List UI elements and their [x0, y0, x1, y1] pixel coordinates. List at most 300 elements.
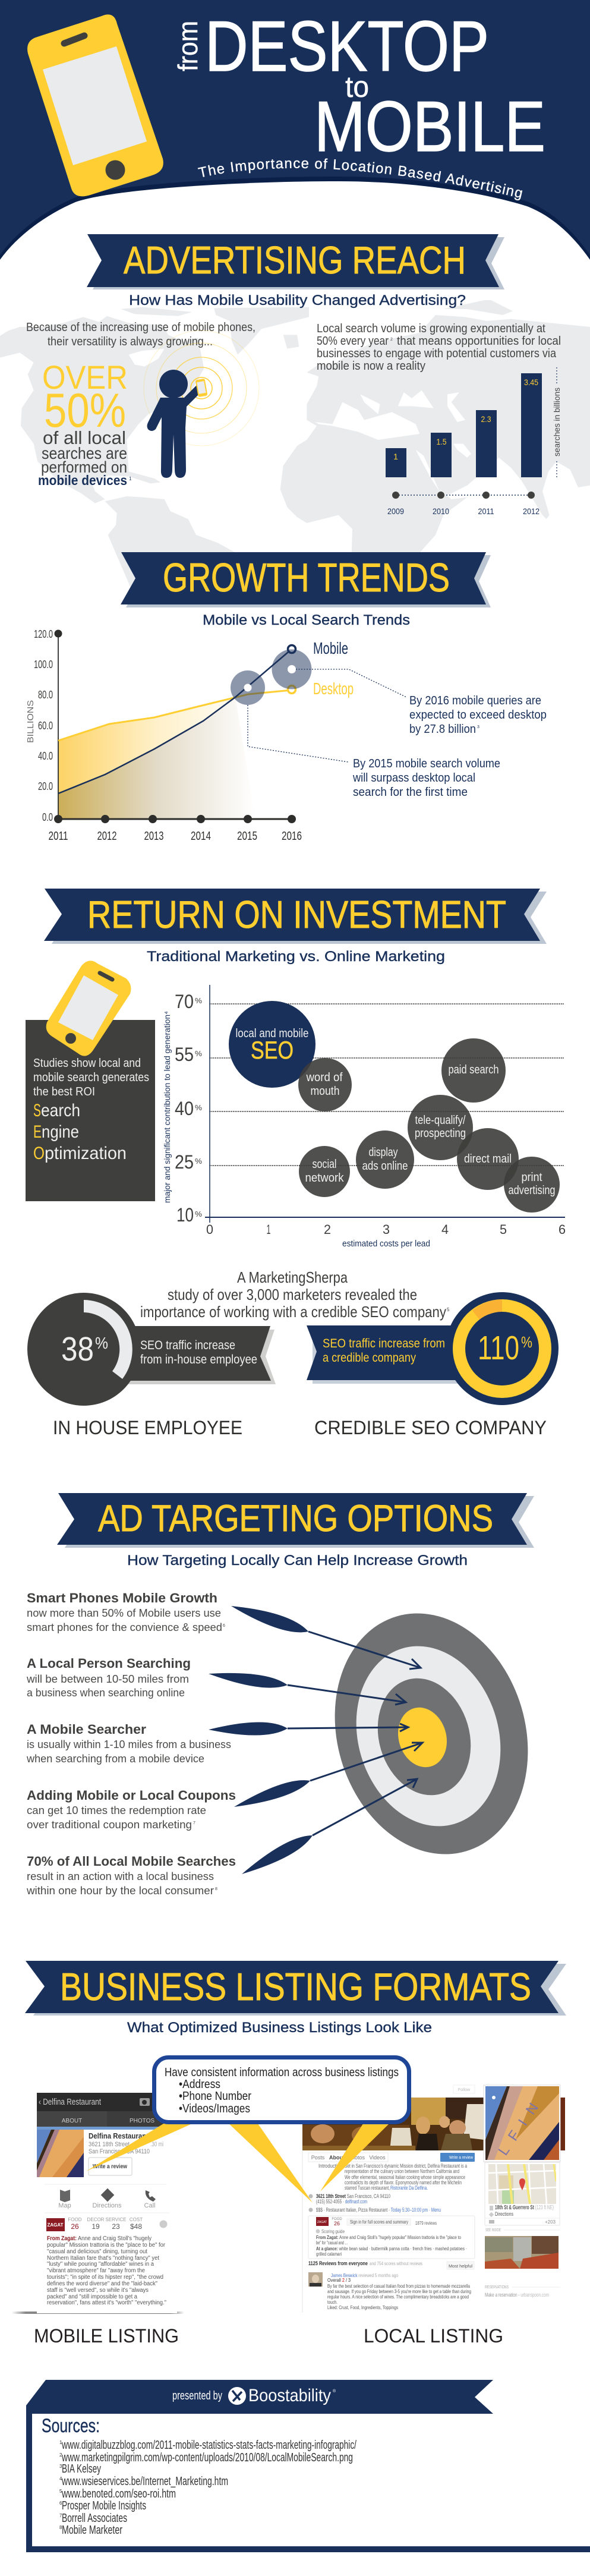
- callout: 2015 mobile search: will surpass desktop local: [352, 771, 475, 785]
- text: local search growth: Local search volume is growing exponentially at: [317, 322, 545, 335]
- icon: tilted yellow phone: [46, 961, 131, 1056]
- timeline axis: 2012: [523, 506, 539, 516]
- zagat description: packed" and "still impossible to get a: [47, 2294, 137, 2300]
- reviews: 1125 Reviews from everyone: [308, 2260, 368, 2266]
- introduction text: Introduction: [318, 2163, 342, 2169]
- end markers: [288, 645, 296, 693]
- bubble: print advertising: [504, 1157, 560, 1213]
- business details: 3621 18th Street: [89, 2141, 130, 2148]
- zagat scores: ZAGAT: [48, 2222, 64, 2228]
- x axis labels: [49, 830, 302, 843]
- banner: growth trends: GROWTH TRENDS: [163, 555, 450, 600]
- app tabs: [37, 2111, 177, 2130]
- label: local listing: LOCAL LISTING: [364, 2325, 503, 2347]
- title: DESKTOP: [205, 7, 489, 86]
- statistic: over 50 percent of local searches: 50%: [44, 384, 126, 437]
- subtitle on curved path: The Importance of Location Based Advertising: [197, 158, 523, 201]
- text: MarketingSherpa study: study of over 3,000 marketers revealed the: [168, 1286, 417, 1303]
- panel: credible SEO company: a credible company: [323, 1351, 416, 1365]
- y axis labels: 40.0: [38, 750, 53, 762]
- statistic: over 50 percent of local searches: mobile devices: [38, 473, 127, 488]
- y axis values: 55: [175, 1044, 194, 1065]
- bubble: tele-qualify prospecting: prospecting: [415, 1127, 466, 1140]
- text: mobile or local coupons: Adding Mobile or Local Coupons: [27, 1788, 236, 1803]
- zagat description: "vibrant atmosphere" far "away from the: [47, 2268, 145, 2274]
- callout box: [154, 2058, 409, 2122]
- callout box: •Phone Number: [179, 2090, 251, 2103]
- zagat panel: [308, 2216, 475, 2259]
- map card: [485, 2162, 560, 2225]
- y axis labels: 120.0: [34, 628, 53, 640]
- business details: [89, 2131, 163, 2175]
- reviews: [308, 2260, 474, 2310]
- text: MarketingSherpa study: 5: [447, 1307, 450, 1312]
- text: smart phones mobile growth: Smart Phones Mobile Growth: [27, 1591, 217, 1605]
- bubble: paid search: paid search: [448, 1063, 499, 1076]
- list: sources: 7: [59, 2513, 62, 2518]
- list: sources: 2: [59, 2452, 62, 2458]
- bubble: direct mail: direct mail: [464, 1152, 512, 1166]
- reservations: RESERVATIONS: [485, 2285, 509, 2290]
- zagat description: [47, 2235, 166, 2306]
- bubble: print advertising: print: [522, 1171, 542, 1184]
- desktop line: [58, 690, 292, 741]
- zagat description: Northern Italian fare that's "nothing fancy" yet: [47, 2255, 159, 2262]
- text: mobile searcher: is usually within 1-10 miles from a business: [27, 1739, 231, 1750]
- text: mobile or local coupons: 7: [193, 1821, 195, 1825]
- address and contact: 3621 18th Street San Francisco, CA 94110: [316, 2193, 390, 2199]
- zagat description: reservation", fans attest it's "worth" "everything.": [47, 2300, 166, 2306]
- icon: target: [307, 1590, 556, 1878]
- panel: credible SEO company: %: [521, 1333, 532, 1351]
- text: 70 percent of local mobile searches: result in an action with a local business: [27, 1870, 214, 1882]
- text: search engine optimization: [33, 1101, 127, 1163]
- callout: 2016 mobile queries: [409, 694, 547, 736]
- chart axes and grid: [205, 985, 565, 1223]
- arrow: local mobile searches: [242, 1779, 417, 1874]
- introduction text: representation of the culinary union between Northern California and: [345, 2168, 459, 2174]
- bar chart: searches in billions: [386, 367, 561, 516]
- highlight 2016: [272, 649, 311, 689]
- action icons: Map: [58, 2202, 71, 2209]
- bar 2009: [386, 448, 406, 477]
- map details: Directions: [495, 2211, 513, 2217]
- text: search engine optimization: O: [33, 1144, 45, 1163]
- title: [172, 7, 545, 166]
- statistic: over 50 percent of local searches: 1: [129, 476, 132, 481]
- list: sources: www.digitalbuzzblog.com/2011-mobile-statistics-stats-facts-marketing-infographic/: [61, 2439, 356, 2452]
- address and contact: $$$ · Restaurant Italian, Pizza Restaurant · Today 5:30–10:00 pm · Menu: [316, 2207, 441, 2213]
- text: local person searching: will be between 10-50 miles from: [26, 1673, 189, 1685]
- x axis values: 4: [441, 1222, 449, 1237]
- bubble: display ads online: display: [368, 1146, 398, 1159]
- x axis values: 6: [559, 1222, 566, 1237]
- banner: advertising reach: [87, 234, 504, 289]
- timeline axis: 2011: [478, 506, 494, 516]
- banner: ad targeting options: AD TARGETING OPTIONS: [98, 1498, 493, 1539]
- list: sources: 1: [59, 2440, 62, 2445]
- see inside photo: SEE INSIDE: [485, 2228, 501, 2232]
- zagat scores: DECOR: [87, 2217, 105, 2222]
- introduction text: [318, 2163, 467, 2191]
- bubble: display ads online: [356, 1130, 414, 1189]
- text: search engine optimization: ptimization: [45, 1144, 127, 1163]
- arrow: local person: [209, 1673, 406, 1705]
- text: local search growth: [317, 322, 561, 373]
- bar 2012: [521, 373, 542, 477]
- text: mobile searcher: when searching from a mobile device: [26, 1753, 204, 1765]
- tabs and review button: [308, 2153, 475, 2162]
- bubble: local and mobile SEO: local and mobile: [235, 1027, 309, 1040]
- series label desktop: Desktop: [313, 679, 354, 698]
- heading: targeting locally: How Targeting Locally Can Help Increase Growth: [127, 1552, 468, 1569]
- bubble: local and mobile SEO: SEO: [251, 1036, 294, 1064]
- callout: 2016 mobile queries: expected to exceed desktop: [409, 708, 547, 722]
- text: MarketingSherpa study: A MarketingSherpa: [237, 1268, 348, 1286]
- list: sources: Mobile Marketer: [62, 2524, 122, 2537]
- icon: large yellow smartphone: [27, 14, 163, 196]
- logo: Boostability: ®: [333, 2389, 336, 2394]
- text: studies: mobile search generates: [33, 1071, 149, 1084]
- introduction text: starred Tuscan restaurant,: [345, 2185, 390, 2191]
- app header: ‹ Delfina Restaurant: [39, 2097, 102, 2107]
- statistic: over 50 percent of local searches: searches are: [42, 444, 127, 462]
- bubble: social network: [299, 1146, 350, 1197]
- y axis title: major and significant contribution to lead generation⁴: [162, 1011, 172, 1203]
- label: in house employee: IN HOUSE EMPLOYEE: [53, 1417, 242, 1438]
- arrow: smart phones: [231, 1606, 421, 1669]
- x axis values: [206, 1222, 566, 1237]
- y axis labels: 0.0: [42, 811, 53, 823]
- text: 70 percent of local mobile searches: 70% of All Local Mobile Searches: [27, 1854, 236, 1869]
- text: mobile phones intro: their versatility is always growing...: [48, 335, 213, 348]
- zagat description: popular" Mission trattoria is the "place to be" for: [47, 2242, 166, 2249]
- x axis values: 1: [266, 1222, 271, 1237]
- x axis labels: 2015: [237, 830, 257, 843]
- bubble: display ads online: ads online: [362, 1160, 408, 1173]
- zagat description: Anne and Craig Stoll's "hugely: [78, 2235, 152, 2242]
- x axis labels: 2013: [144, 830, 164, 843]
- label: mobile listing: MOBILE LISTING: [34, 2325, 179, 2347]
- action icons: Call: [144, 2202, 155, 2209]
- introduction text: Ristorante Da Delfina.: [390, 2185, 428, 2191]
- statistic: over 50 percent of local searches: OVER: [42, 358, 128, 396]
- text: mobile searcher: [26, 1722, 231, 1765]
- heading: traditional vs online: Traditional Marketing vs. Online Marketing: [147, 949, 445, 965]
- bar 2012: 3.45: [524, 377, 538, 387]
- axes: [54, 630, 296, 823]
- heading: advertising reach question: How Has Mobile Usability Changed Advertising?: [129, 292, 466, 308]
- zagat panel: 1879 reviews: [415, 2221, 437, 2226]
- text: studies: the best ROI: [33, 1085, 95, 1098]
- see inside photo: [485, 2228, 560, 2269]
- zagat scores: 19: [92, 2222, 100, 2231]
- zagat panel: 26: [334, 2221, 340, 2227]
- leader line 2016: [296, 669, 406, 697]
- x axis title: estimated costs per lead: [342, 1239, 430, 1249]
- zagat description: staff is "well versed", so while it's "always: [47, 2287, 149, 2294]
- text: local person searching: [26, 1656, 191, 1699]
- business details: San Francisco, CA 94110: [89, 2148, 150, 2155]
- y axis values: %: [195, 1103, 202, 1112]
- text: MarketingSherpa study: [140, 1268, 450, 1321]
- zagat scores: SERVICE: [106, 2217, 126, 2222]
- reviews: Most helpful: [449, 2265, 472, 2269]
- banner: return on investment: [44, 889, 547, 944]
- y axis values: 40: [175, 1098, 194, 1119]
- timeline axis: 2010: [433, 506, 449, 516]
- text: local person searching: A Local Person Searching: [27, 1656, 191, 1671]
- text: local person searching: a business when searching online: [27, 1687, 185, 1699]
- text: studies: [33, 1057, 149, 1098]
- restaurant sign photo card: LFIN: [496, 2100, 542, 2158]
- banner: advertising reach: ADVERTISING REACH: [124, 238, 466, 282]
- reviews: and sausage. If you go Friday between 3-5 you're more like to get a table than during: [327, 2288, 471, 2294]
- callout box: Have consistent information across business listings: [165, 2066, 399, 2079]
- text: smart phones mobile growth: 6: [223, 1624, 225, 1628]
- y axis values: %: [195, 1157, 202, 1166]
- callout box: •Videos/Images: [179, 2102, 250, 2115]
- panel: in house employee: SEO traffic increase: [140, 1339, 235, 1352]
- panel: credible SEO company: SEO traffic increase from: [323, 1337, 445, 1350]
- heading: mobile vs local search trends: Mobile vs Local Search Trends: [203, 612, 410, 628]
- list: sources: 3: [59, 2464, 62, 2469]
- y axis labels: 60.0: [38, 720, 53, 732]
- x axis values: 2: [324, 1222, 331, 1237]
- panel: in house employee: %: [95, 1334, 108, 1352]
- business details: .30 mi: [150, 2141, 163, 2148]
- callout: 2015 mobile search: search for the first time: [353, 786, 468, 799]
- title: from: [172, 21, 203, 71]
- text: 70 percent of local mobile searches: [26, 1854, 236, 1897]
- reviews: regular hours. A nice selection of wines. The complimentary breadsticks are a good: [327, 2294, 469, 2300]
- y axis values: %: [195, 1049, 202, 1058]
- zagat panel: ZAGAT: [317, 2221, 327, 2224]
- panel: in house employee: from in-house employee: [140, 1353, 257, 1366]
- tabs and review button: About: [329, 2155, 345, 2161]
- text: local search growth: 50% every year: [317, 335, 389, 348]
- text: mobile or local coupons: over traditional coupon marketing: [27, 1819, 192, 1831]
- zagat scores: COST: [130, 2217, 143, 2222]
- reviews: touch.: [327, 2299, 337, 2305]
- zagat description: defines the word diverse" and the "laid-back": [47, 2281, 157, 2287]
- panel: local listing screenshot: [302, 2085, 565, 2313]
- reviews: and 754 scores without reviews: [370, 2260, 422, 2266]
- text: local search growth: mobile is now a reality: [317, 360, 425, 373]
- text: mobile phones intro: [26, 321, 255, 348]
- list: sources: www.benoted.com/seo-roi.htm: [61, 2487, 176, 2501]
- statistic: over 50 percent of local searches: [38, 358, 132, 488]
- panel: SEO best ROI: [26, 961, 155, 1201]
- x axis values: 0: [206, 1222, 213, 1237]
- title: to: [345, 70, 369, 103]
- y axis values: %: [195, 1210, 202, 1218]
- list: sources: [59, 2439, 356, 2537]
- panel: in house employee: [27, 1293, 276, 1406]
- bubble: local and mobile SEO: [229, 1001, 315, 1088]
- banner: ad targeting options: [57, 1493, 534, 1548]
- x axis labels: 2014: [191, 830, 211, 843]
- panel: mobile listing screenshot: [12, 2093, 184, 2314]
- zagat scores: 26: [71, 2222, 79, 2231]
- bubble: social network: social: [313, 1158, 336, 1171]
- text: mobile phones intro: Because of the increasing use of mobile phones,: [26, 321, 255, 334]
- zagat description: "casual and delicious" dining, turning out: [47, 2249, 147, 2255]
- tabs and review button: Photos: [348, 2155, 365, 2161]
- x axis values: 3: [383, 1222, 390, 1237]
- reservations: Make a reservation - urbanspoon.com: [485, 2292, 549, 2298]
- bubble: word of mouth: word of: [306, 1071, 343, 1084]
- reviews: James Beswick reviewed 5 months ago: [331, 2272, 398, 2278]
- icon: signal rings around phone: [144, 330, 259, 446]
- business details: Delfina Restaurant: [89, 2131, 149, 2140]
- callout: consistent business information: [86, 2058, 409, 2203]
- presented by: presented by: [172, 2389, 222, 2402]
- introduction text: We offer elemental, seasonal Italian cooking whose simple appearance: [345, 2174, 465, 2180]
- zagat scores: 23: [112, 2222, 120, 2231]
- zagat panel: be" for "casual and ...: [316, 2240, 348, 2246]
- bubble: print advertising: advertising: [509, 1184, 555, 1197]
- panel: credible SEO company: [307, 1292, 559, 1405]
- zagat panel: FOOD: [332, 2218, 342, 2221]
- text: smart phones mobile growth: [27, 1591, 225, 1633]
- list: sources: Prosper Mobile Insights: [62, 2499, 146, 2512]
- follow button: Follow: [458, 2088, 471, 2092]
- list: sources: Borrell Associates: [62, 2512, 127, 2525]
- text: local search growth: 2: [390, 338, 393, 342]
- y axis labels: 20.0: [38, 780, 53, 792]
- address and contact: (415) 552-4055 · delfinasf.com: [316, 2199, 367, 2205]
- reviews: Liked: Crust, Food, Ingredients, Toppings: [327, 2304, 398, 2310]
- introduction text: contradicts its depth of flavor. Eponymously named after the Michelin: [345, 2180, 462, 2185]
- callout box: •Address: [179, 2078, 220, 2091]
- list: sources: www.marketingpilgrim.com/wp-content/uploads/2010/08/LocalMobileSearch.png: [61, 2451, 353, 2464]
- action icons: Directions: [93, 2202, 122, 2209]
- zagat description: tourists"; "in spite of its hipster rep", "the crowd: [47, 2274, 163, 2281]
- app tabs: ABOUT: [62, 2118, 82, 2124]
- list: sources: 8: [59, 2525, 62, 2530]
- text: local search growth: businesses to engage with potential customers via: [317, 347, 557, 360]
- panel: in house employee: 38: [61, 1330, 94, 1368]
- reservations: [485, 2285, 560, 2298]
- bubble chart: cost vs lead generation: [162, 985, 566, 1249]
- statistic: over 50 percent of local searches: of all local: [43, 427, 126, 448]
- logo: Boostability: Boostability: [248, 2386, 331, 2405]
- list: sources: 5: [59, 2489, 62, 2494]
- follow button: [453, 2085, 475, 2093]
- zagat panel: From Zagat: Anne and Craig Stoll's "hugely popular" Mission trattoria is the "place to: [316, 2235, 461, 2240]
- arrow: coupons: [234, 1743, 422, 1807]
- line chart: mobile vs desktop search: [26, 628, 406, 843]
- highlight 2015: [231, 670, 265, 705]
- zagat scores: [46, 2217, 168, 2231]
- text: smart phones mobile growth: smart phones for the convience & speed: [27, 1621, 222, 1633]
- text: mobile searcher: A Mobile Searcher: [27, 1722, 146, 1737]
- app header: [37, 2093, 177, 2111]
- address and contact: [309, 2193, 441, 2213]
- text: search engine optimization: E: [33, 1122, 42, 1142]
- callout: 2016 mobile queries: 3: [477, 725, 479, 729]
- text: mobile or local coupons: [27, 1788, 236, 1831]
- zagat panel: Scoring guide: [321, 2229, 345, 2234]
- y axis values: 10: [176, 1204, 194, 1226]
- introduction text: Set in San Francisco's dynamic Mission district, Delfina Restaurant is a: [345, 2163, 467, 2169]
- y axis title: BILLIONS: [26, 700, 36, 743]
- text: smart phones mobile growth: now more than 50% of Mobile users use: [27, 1607, 221, 1619]
- y axis values: 70: [175, 991, 194, 1012]
- banner: return on investment: RETURN ON INVESTMENT: [87, 893, 506, 936]
- statistic: over 50 percent of local searches: performed on: [41, 458, 127, 476]
- text: search engine optimization: earch: [41, 1101, 80, 1120]
- x axis labels: 2011: [49, 830, 68, 843]
- list: sources: www.wsieservices.be/Internet_Marketing.htm: [61, 2475, 228, 2488]
- banner: growth trends: [121, 552, 491, 607]
- x axis labels: 2012: [97, 830, 116, 843]
- x axis labels: 2016: [282, 830, 302, 843]
- y axis label: searches in billions: [552, 388, 561, 456]
- bar 2011: 2.3: [481, 414, 491, 424]
- restaurant sign thumbnail: [37, 2130, 84, 2177]
- zagat scores: FOOD: [68, 2217, 82, 2222]
- y axis values: [175, 991, 202, 1226]
- bubble: word of mouth: [298, 1058, 352, 1111]
- list: sources: BIA Kelsey: [62, 2462, 101, 2476]
- business details: Write a review: [93, 2164, 127, 2170]
- y axis labels: 100.0: [34, 659, 53, 670]
- list: sources: 6: [59, 2501, 62, 2506]
- text: search engine optimization: ngine: [42, 1122, 79, 1142]
- callout: 2015 mobile search: [352, 757, 500, 799]
- y axis values: %: [195, 996, 202, 1005]
- mobile line: [58, 649, 292, 793]
- bar 2010: [431, 433, 452, 477]
- leader line 2015: [248, 705, 348, 762]
- bubble: word of mouth: mouth: [310, 1085, 340, 1098]
- series label mobile: Mobile: [313, 639, 348, 657]
- text: 70 percent of local mobile searches: 8: [215, 1887, 217, 1891]
- panel: credible SEO company: 110: [478, 1329, 519, 1367]
- action icons: [45, 2184, 169, 2213]
- app tabs: PHOTOS: [130, 2118, 154, 2124]
- reviews: By far the best selection of casual Italian food from pizzas to homemade mozzarella: [327, 2283, 470, 2289]
- bubble: social network: network: [305, 1172, 344, 1185]
- zagat panel: Sign in for full scores and summary: [350, 2219, 408, 2225]
- heading: optimized business listings: What Optimized Business Listings Look Like: [127, 2020, 432, 2036]
- zagat panel: grilled calamari: [316, 2251, 342, 2257]
- map details: [485, 2205, 560, 2225]
- bar 2009: 1: [393, 452, 398, 461]
- list: sources: 4: [59, 2476, 62, 2481]
- zagat description: From Zagat:: [47, 2235, 77, 2242]
- zagat scores: $48: [130, 2222, 142, 2231]
- tabs and review button: Posts: [311, 2155, 325, 2161]
- label: credible SEO company: CREDIBLE SEO COMPANY: [314, 1417, 547, 1438]
- zagat panel: At a glance: white bean salad · buttermilk panna cotta · french fries · mashed potatoes ·: [316, 2246, 467, 2251]
- map details: +203: [545, 2219, 556, 2225]
- icon: person holding phone: [147, 370, 207, 478]
- y axis labels: [34, 628, 53, 823]
- x axis values: 5: [500, 1222, 507, 1237]
- arrow: mobile searcher: [209, 1722, 408, 1736]
- text: mobile or local coupons: can get 10 times the redemption rate: [27, 1805, 206, 1816]
- text: 70 percent of local mobile searches: within one hour by the local consumer: [26, 1885, 214, 1897]
- callout: 2016 mobile queries: by 27.8 billion: [409, 723, 476, 736]
- y axis values: 25: [175, 1151, 194, 1173]
- callout: 2015 mobile search: By 2015 mobile search volume: [353, 757, 500, 770]
- title: MOBILE: [314, 87, 545, 166]
- tabs and review button: Videos: [369, 2155, 386, 2161]
- text: search engine optimization: S: [33, 1101, 41, 1120]
